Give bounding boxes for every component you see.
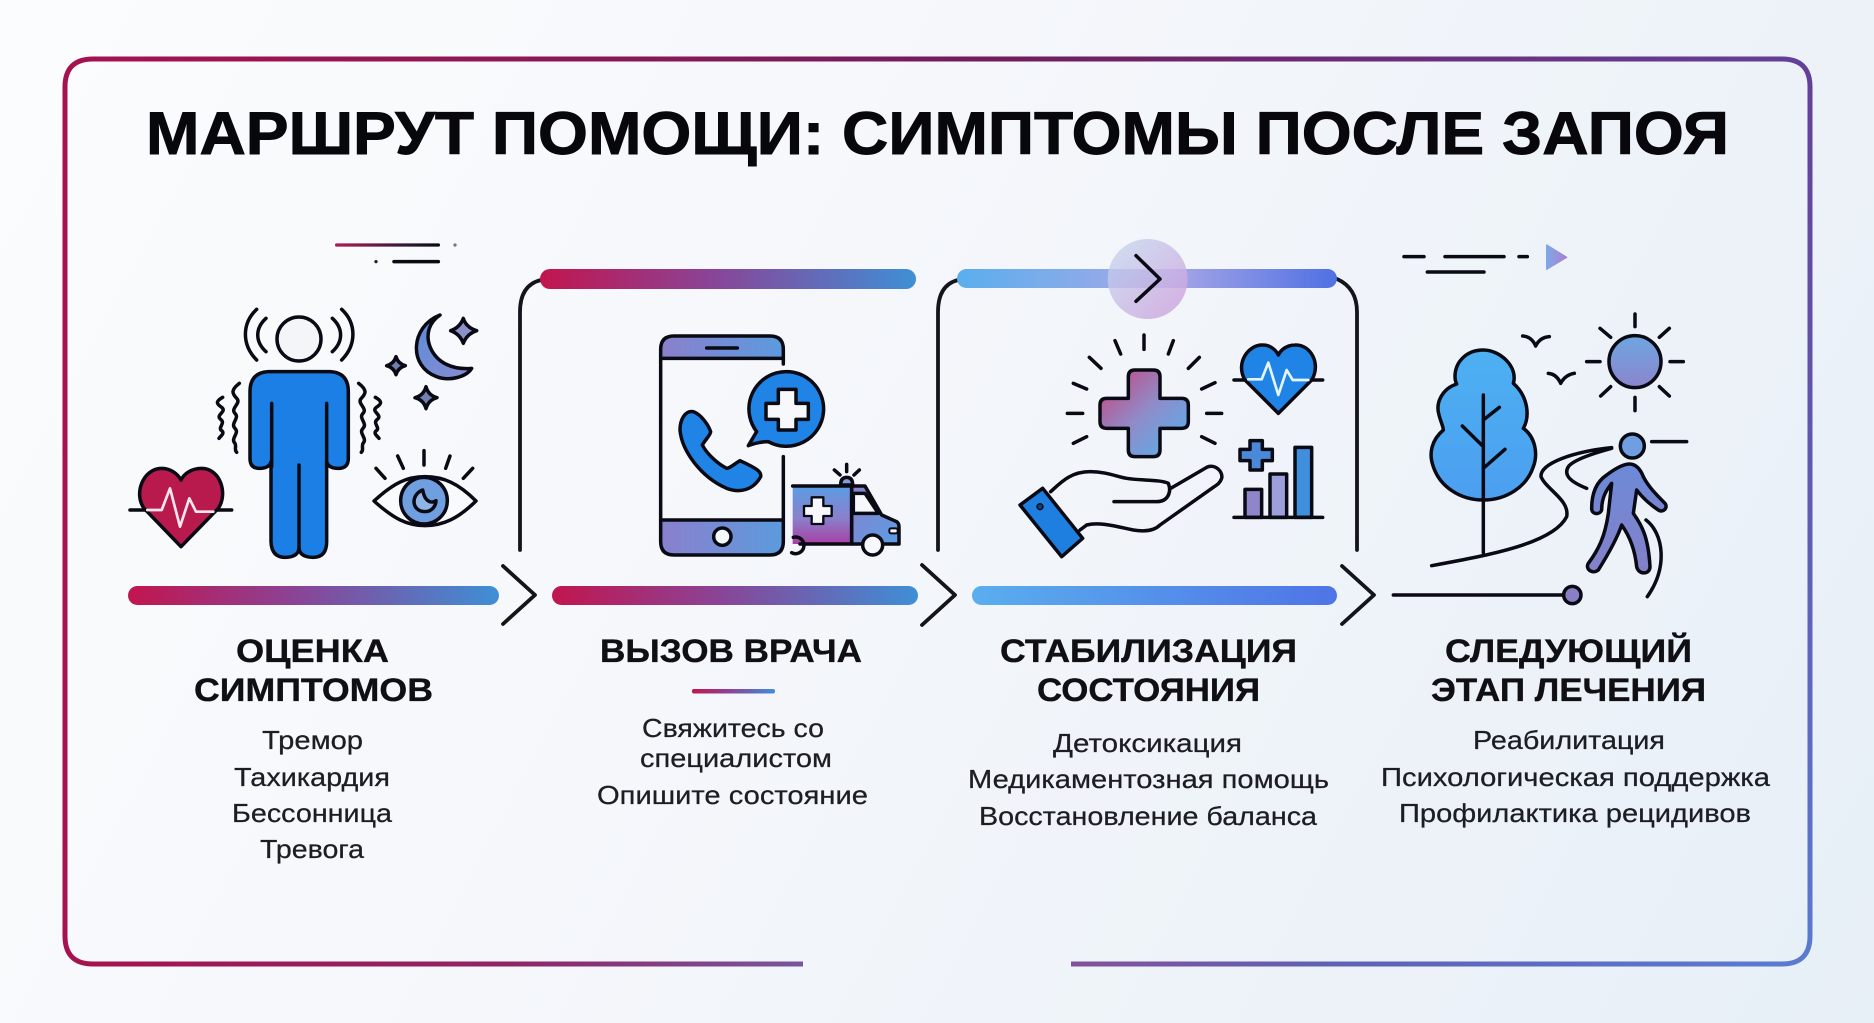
- short divider: [692, 689, 775, 694]
- bracket line 2: [520, 280, 541, 550]
- heading: next stage: СЛЕДУЮЩИЙ: [1445, 633, 1692, 669]
- heading: assessment: ОЦЕНКА: [236, 633, 389, 669]
- heading: stabilization: СТАБИЛИЗАЦИЯ: [1000, 633, 1297, 669]
- text: stabilization list: Детоксикация: [1053, 728, 1242, 758]
- text: symptom list: Тахикардия: [234, 762, 390, 792]
- text: doctor instructions: [597, 713, 868, 810]
- progress bar 2: [552, 586, 918, 605]
- text: stabilization list: Восстановление баланса: [979, 801, 1318, 831]
- text: symptom list: [232, 725, 393, 864]
- arrow 2: [922, 565, 955, 625]
- heading: calling a doctor: ВЫЗОВ ВРАЧА: [600, 633, 862, 669]
- text: next stage list: Психологическая поддержка: [1381, 762, 1771, 792]
- text: next stage list: Реабилитация: [1473, 725, 1665, 755]
- icon: medical hand and stats: [1020, 239, 1323, 557]
- text: doctor instructions: Опишите состояние: [597, 780, 868, 810]
- heading: next stage: ЭТАП ЛЕЧЕНИЯ: [1431, 672, 1706, 708]
- top bar 3: [957, 269, 1337, 288]
- panel: step 4 next treatment stage: [1381, 245, 1771, 828]
- progress bar 3: [972, 586, 1337, 605]
- icon: phone and ambulance: [661, 336, 899, 555]
- text: stabilization list: [968, 728, 1329, 831]
- title: МАРШРУТ ПОМОЩИ: СИМПТОМЫ ПОСЛЕ ЗАПОЯ: [146, 100, 1729, 167]
- text: symptom list: Тревога: [260, 834, 365, 864]
- heading: stabilization: СОСТОЯНИЯ: [1037, 672, 1260, 708]
- heading: stabilization: [1000, 633, 1297, 708]
- panel: step 2 calling a doctor: [520, 269, 955, 810]
- arrow 3: [1342, 566, 1374, 624]
- progress bar 1: [128, 586, 499, 605]
- panel: step 1 symptoms assessment: [128, 243, 535, 864]
- panel: step 3 stabilization: [938, 239, 1374, 831]
- text: stabilization list: Медикаментозная помощь: [968, 764, 1329, 794]
- top bar 2: [540, 269, 916, 289]
- icon: symptoms illustration: [130, 243, 477, 557]
- text: next stage list: Профилактика рецидивов: [1399, 798, 1751, 828]
- text: next stage list: [1381, 725, 1771, 828]
- text: symptom list: Бессонница: [232, 798, 393, 828]
- text: doctor instructions: Свяжитесь со: [642, 713, 824, 743]
- text: symptom list: Тремор: [262, 725, 363, 755]
- icon: tree, sun and walking person: [1393, 245, 1687, 604]
- heading: assessment: СИМПТОМОВ: [194, 672, 433, 708]
- heading: next stage: [1431, 633, 1706, 708]
- heading: assessment: [194, 633, 433, 708]
- arrow 1: [503, 566, 535, 624]
- bracket line 3: [938, 279, 1357, 550]
- text: doctor instructions: специалистом: [640, 743, 832, 773]
